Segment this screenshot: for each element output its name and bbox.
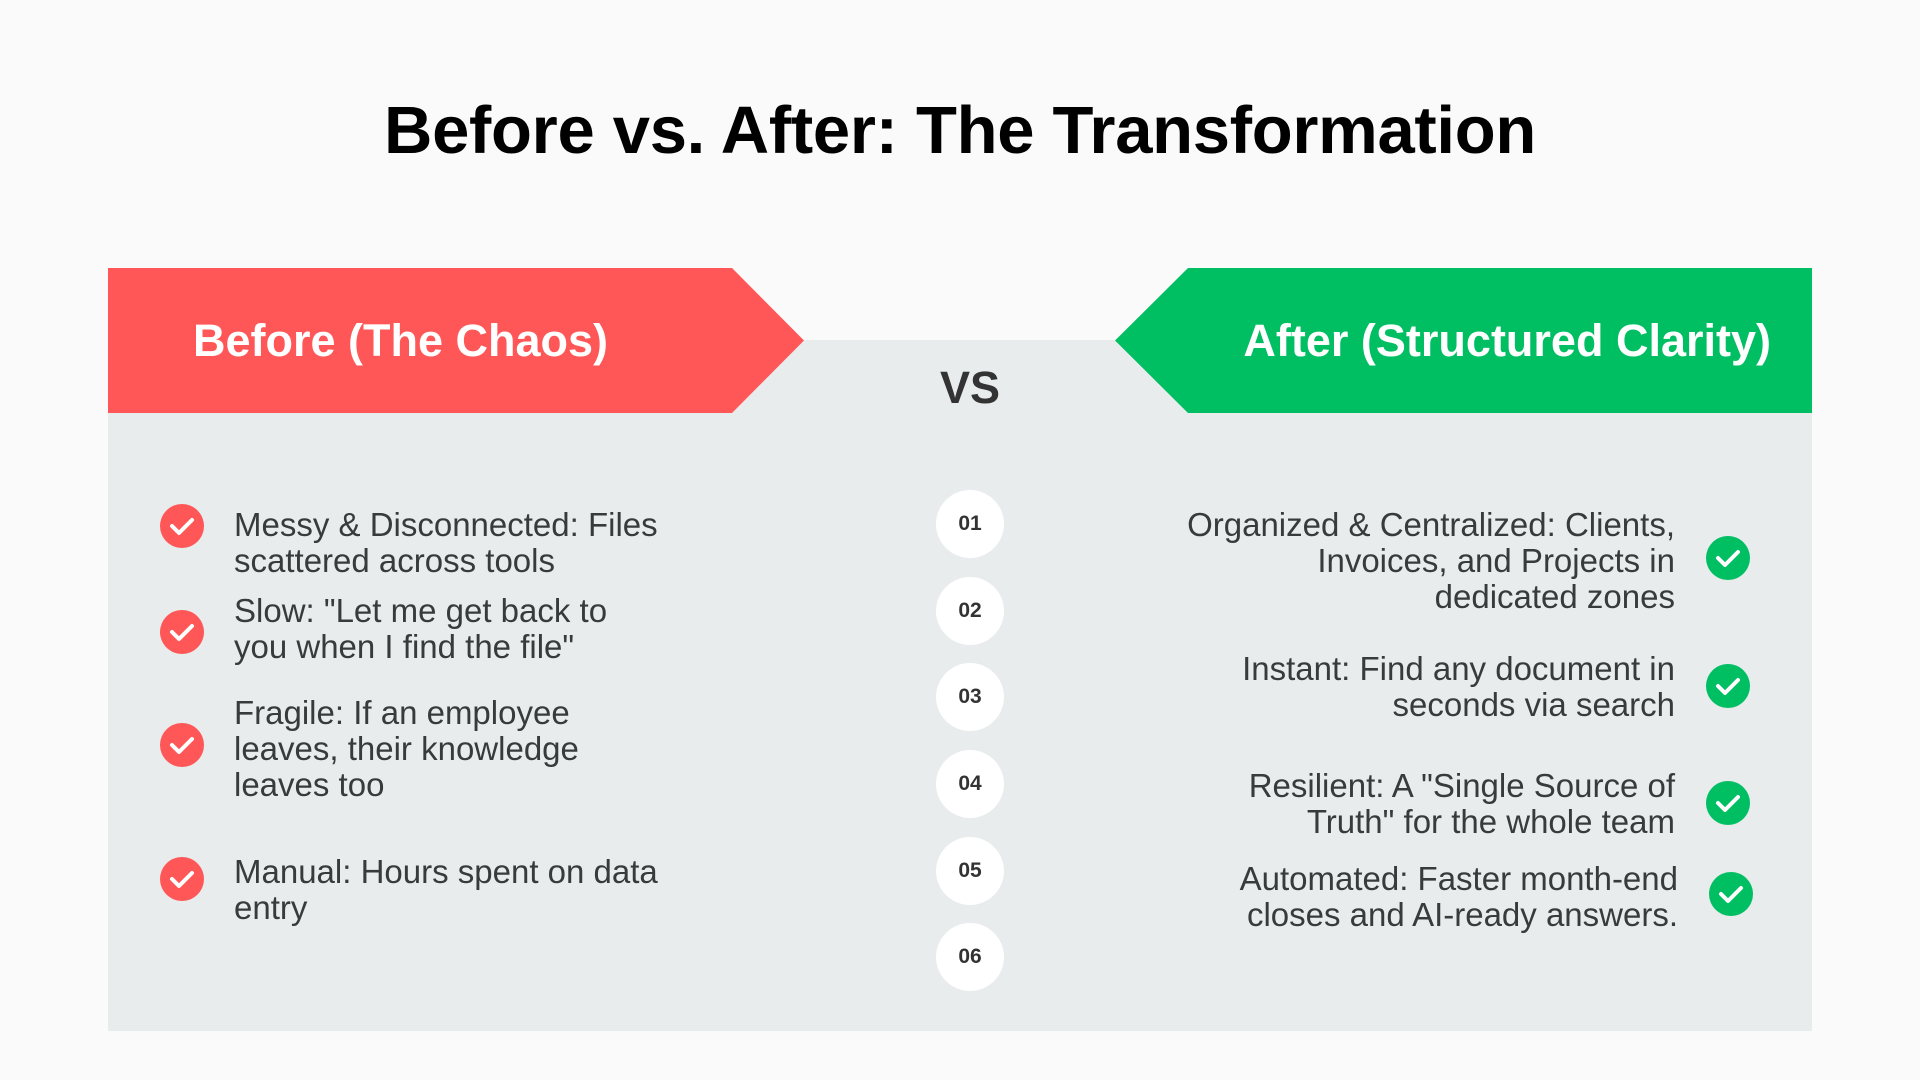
header: after (1115, 268, 1812, 413)
text: fragile: leaves too (234, 766, 384, 803)
header: before (108, 268, 804, 413)
text: resilient (1249, 767, 1676, 840)
number circles: 05 (958, 859, 982, 882)
text: manual: Manual: Hours spent on data (234, 853, 658, 890)
text: resilient: Resilient: A "Single Source of (1249, 767, 1675, 804)
text: instant (1242, 650, 1675, 723)
text: manual: entry (234, 889, 307, 926)
text: resilient: Truth" for the whole team (1307, 803, 1675, 840)
text: automated: Automated: Faster month-end (1240, 860, 1678, 897)
VS label: VS (940, 362, 1000, 413)
text: instant: Instant: Find any document in (1242, 650, 1675, 687)
text: organized (1187, 506, 1675, 615)
header: after: After (Structured Clarity) (1243, 315, 1771, 366)
text: fragile (234, 694, 579, 803)
icon: red check 3 (160, 723, 204, 767)
text: automated: closes and AI-ready answers. (1247, 896, 1678, 933)
icon: green check 3 (1706, 781, 1750, 825)
icon: green check 1 (1706, 536, 1750, 580)
text: organized: dedicated zones (1435, 578, 1675, 615)
text: slow: Slow: "Let me get back to (234, 592, 607, 629)
icon: green check 4 (1709, 872, 1753, 916)
text: messy (234, 506, 658, 579)
number circles: 01 (958, 512, 982, 535)
text: organized: Organized & Centralized: Clients, (1187, 506, 1675, 543)
number circles (936, 490, 1004, 991)
number circles: 06 (958, 945, 982, 968)
icon: red check 4 (160, 857, 204, 901)
icon: green check 2 (1706, 664, 1750, 708)
text: instant: seconds via search (1393, 686, 1675, 723)
text: manual (234, 853, 658, 926)
right list: after items (1187, 506, 1753, 933)
text: slow: you when I find the file" (234, 628, 574, 665)
number circles: 03 (958, 685, 982, 708)
number circles: 02 (958, 599, 982, 622)
text: fragile: leaves, their knowledge (234, 730, 579, 767)
text: messy: Messy & Disconnected: Files (234, 506, 658, 543)
icon: red check 2 (160, 610, 204, 654)
header: before: Before (The Chaos) (193, 315, 608, 366)
text: fragile: Fragile: If an employee (234, 694, 570, 731)
text: slow (234, 592, 607, 665)
left list: before items (160, 504, 658, 926)
panel: comparison background (108, 340, 1812, 1031)
number circles: 04 (958, 772, 982, 795)
text: automated (1240, 860, 1678, 933)
text: messy: scattered across tools (234, 542, 555, 579)
title: Before vs. After: The Transformation (384, 93, 1536, 168)
text: organized: Invoices, and Projects in (1317, 542, 1675, 579)
icon: red check 1 (160, 504, 204, 548)
